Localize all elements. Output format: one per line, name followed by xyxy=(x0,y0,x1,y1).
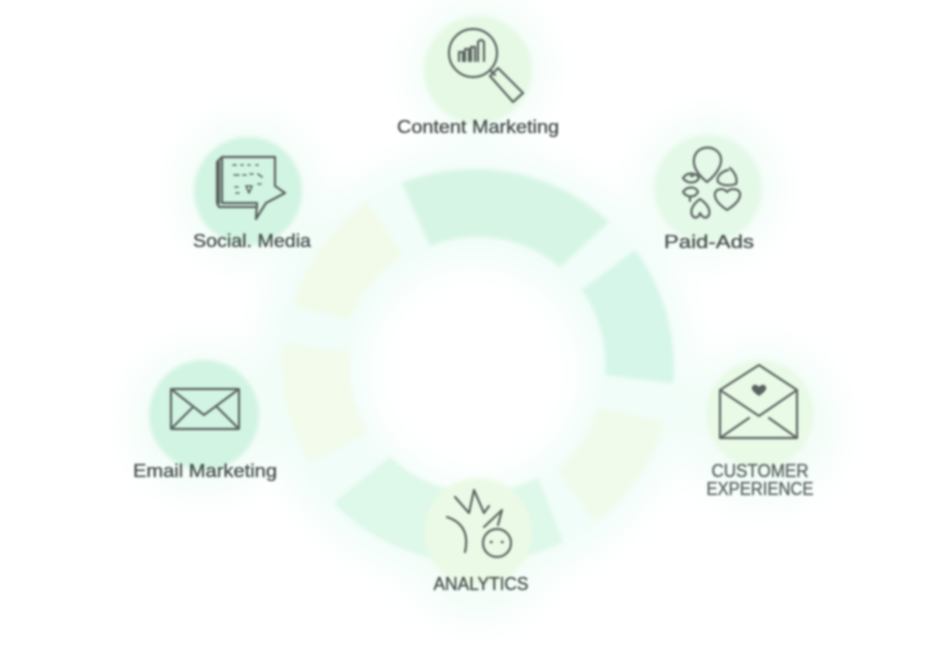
label: Customer Experience: EXPERIENCE xyxy=(706,479,814,499)
label: Paid-Ads: Paid-Ads xyxy=(664,232,754,252)
node: Social Media xyxy=(193,137,312,251)
icon: spark and smiley xyxy=(447,490,511,557)
icon background: customer experience xyxy=(706,360,814,468)
segment: top xyxy=(402,169,609,267)
node: Content Marketing xyxy=(397,16,559,137)
icon background: paid ads xyxy=(654,135,762,243)
icon: balloon and hearts xyxy=(683,148,740,218)
icon: speech bubble xyxy=(217,157,285,219)
label: Analytics: ANALYTICS xyxy=(434,574,528,594)
segment: bottom xyxy=(334,457,563,563)
segment: lower right xyxy=(557,407,665,522)
node: Email Marketing xyxy=(133,360,277,481)
segment: left xyxy=(281,343,368,463)
segment: upper left xyxy=(293,202,403,320)
node: Paid-Ads xyxy=(654,135,762,252)
node: Customer Experience xyxy=(706,360,814,499)
label: Content Marketing: Content Marketing xyxy=(397,117,559,137)
label: Customer Experience xyxy=(706,461,814,499)
icon background: social xyxy=(194,137,302,245)
soft background glow xyxy=(128,0,840,622)
label: Customer Experience: CUSTOMER xyxy=(712,461,808,481)
ring of six segments xyxy=(281,169,674,563)
icon: magnifier with bars xyxy=(449,29,523,102)
icon: envelope xyxy=(171,389,239,429)
icon background: analytics xyxy=(424,478,532,586)
icon background: email xyxy=(149,360,259,470)
label: Social Media: Social. Media xyxy=(193,231,312,251)
node: Analytics xyxy=(424,478,532,594)
label: Email Marketing: Email Marketing xyxy=(133,461,277,481)
segment: right xyxy=(582,250,674,383)
icon: open envelope with heart xyxy=(720,365,797,438)
icon background: content xyxy=(424,16,532,124)
